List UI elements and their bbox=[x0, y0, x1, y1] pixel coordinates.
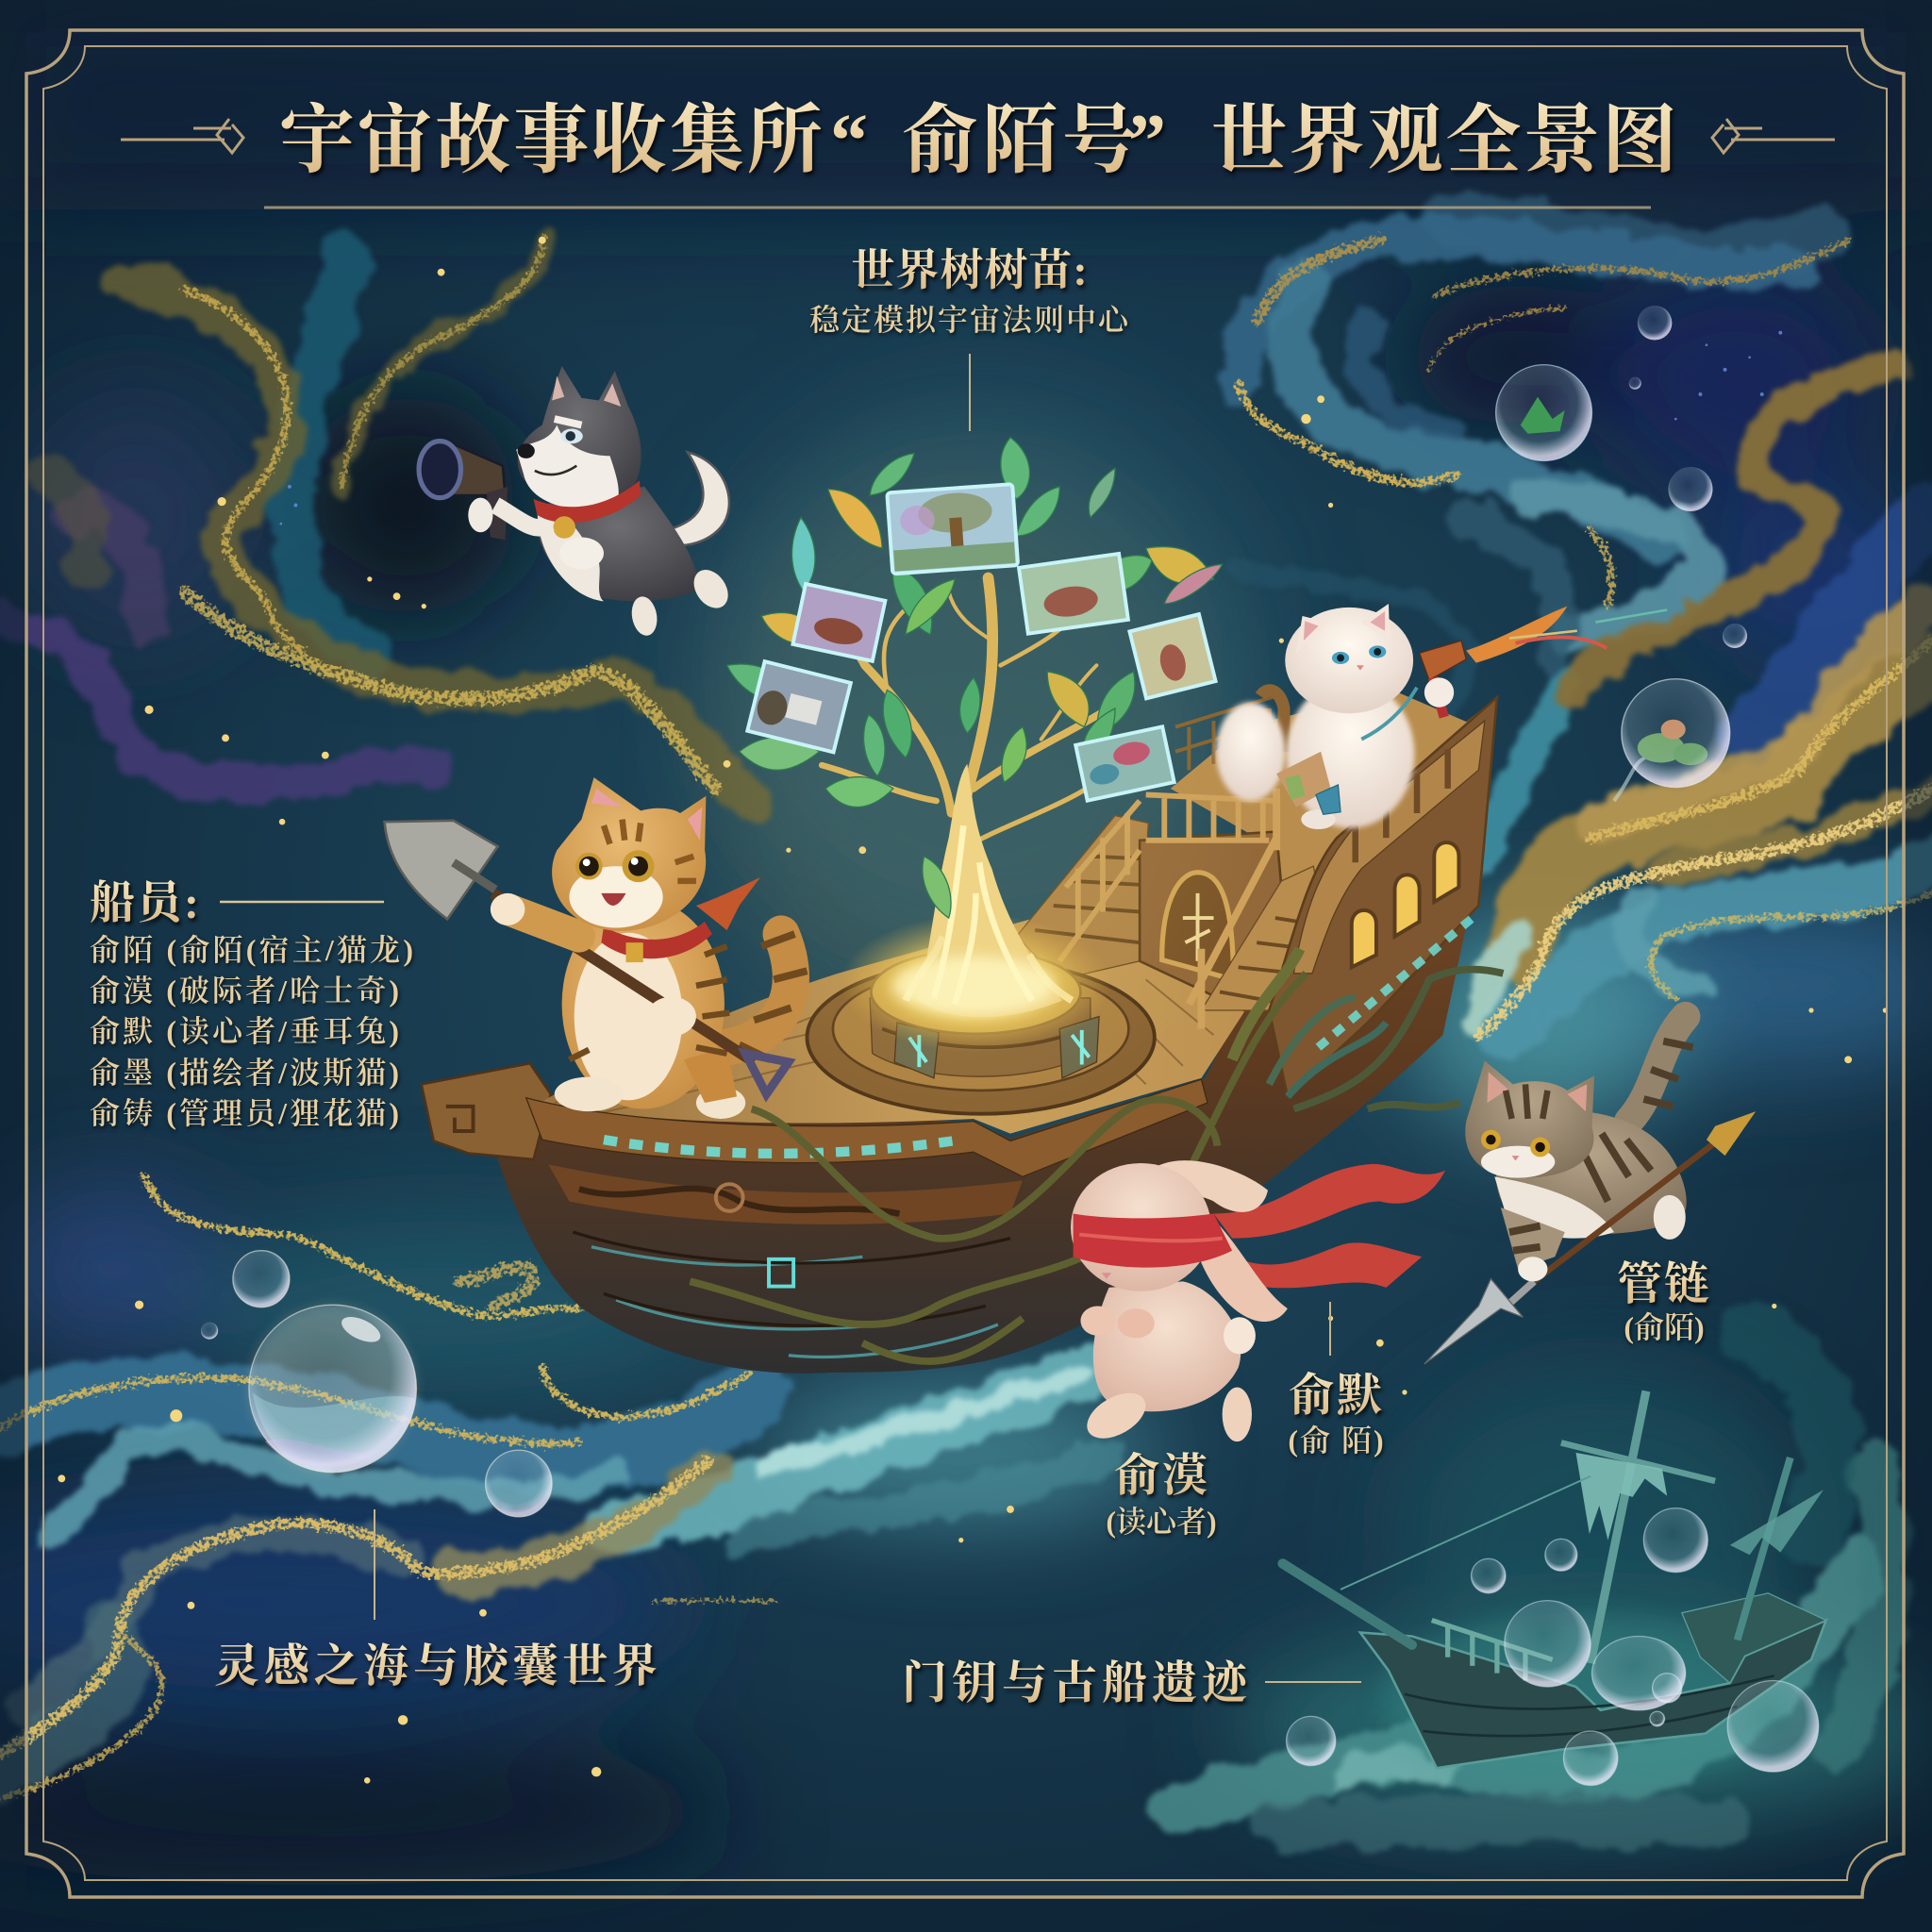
title text: ” bbox=[1128, 100, 1166, 183]
label: 俞漠: (读心者) bbox=[1106, 1505, 1217, 1539]
rabbit head bbox=[1071, 1163, 1211, 1291]
cat tail bbox=[727, 934, 791, 1047]
shovel bbox=[492, 893, 754, 1062]
ghost shipwreck bbox=[1283, 1391, 1826, 1787]
tree memory cards bbox=[747, 484, 1216, 801]
label: keys and ancient ship ruins: 门钥与古船遗迹 bbox=[902, 1658, 1250, 1708]
tabby cat with spear bbox=[1424, 1017, 1756, 1364]
husky head bbox=[518, 366, 641, 507]
husky body bbox=[537, 487, 700, 601]
label: world tree sapling bbox=[809, 246, 1131, 431]
tree leaves bbox=[727, 438, 1223, 918]
cat head bbox=[552, 777, 706, 931]
husky with telescope bbox=[419, 366, 735, 638]
cat legs and body bbox=[562, 899, 724, 1108]
label: 俞默: 俞默 bbox=[1289, 1371, 1385, 1421]
crew list: 俞漠 (破际者/哈士奇) bbox=[90, 974, 399, 1008]
crew list: 船员: bbox=[90, 878, 201, 928]
label: 管链: 管链 bbox=[1617, 1259, 1711, 1309]
persian cat with spray gun bbox=[1216, 604, 1667, 829]
husky telescope bbox=[446, 441, 506, 495]
title text: 宇宙故事收集所 bbox=[279, 100, 823, 183]
title bbox=[121, 100, 1835, 183]
rabbit blindfold tails bbox=[1214, 1164, 1445, 1239]
cat wing and collar bbox=[696, 877, 760, 930]
title divider bbox=[264, 206, 1651, 209]
label: world tree sapling: 稳定模拟宇宙法则中心 bbox=[809, 303, 1131, 337]
tabby spear bbox=[1534, 1140, 1719, 1281]
crew list: 俞默 (读心者/垂耳兔) bbox=[90, 1014, 399, 1048]
label: 俞默 bbox=[1288, 1302, 1386, 1457]
persian body bbox=[1287, 680, 1414, 828]
ship main deck bbox=[540, 838, 1269, 1134]
label: 管链: (俞陌) bbox=[1624, 1310, 1705, 1344]
label: 管链 bbox=[1617, 1259, 1711, 1344]
wreck bubbles bbox=[1287, 1508, 1819, 1786]
persian tail bbox=[1216, 702, 1285, 801]
stern cabin with door bbox=[1140, 832, 1281, 1010]
stern windows bbox=[1352, 842, 1458, 967]
tree branches bbox=[820, 578, 1124, 850]
cat arms bbox=[508, 909, 579, 937]
nebula: star sparkles bbox=[58, 237, 1888, 1784]
crew list bbox=[90, 878, 413, 1130]
crew list: 俞铸 (管理员/狸花猫) bbox=[90, 1096, 399, 1130]
rabbit ears bbox=[1140, 1160, 1268, 1212]
ship bow block bbox=[422, 1063, 551, 1159]
staircase left bbox=[1017, 816, 1148, 979]
ship rail with runes bbox=[526, 1079, 1208, 1176]
tree trunk flame bbox=[918, 764, 1062, 1017]
ship hull bbox=[498, 697, 1497, 1374]
title ornament right bbox=[1712, 119, 1835, 153]
ship bbox=[422, 690, 1503, 1374]
label: 俞漠 bbox=[1106, 1451, 1217, 1539]
label: 俞默: (俞 陌) bbox=[1288, 1424, 1386, 1457]
world tree bbox=[702, 438, 1223, 1072]
persian head bbox=[1285, 608, 1413, 713]
label: world tree sapling: 世界树树苗: bbox=[851, 246, 1089, 294]
bubbles: capsule worlds left bbox=[201, 1251, 552, 1517]
husky collar bbox=[534, 480, 641, 523]
stern upper deck bbox=[1171, 690, 1478, 918]
tabby head bbox=[1465, 1061, 1594, 1178]
title text: “ bbox=[830, 100, 868, 183]
ship vines bbox=[690, 949, 1503, 1361]
title ornament left bbox=[121, 119, 243, 153]
title text: 俞陌号 bbox=[902, 100, 1138, 183]
husky tail bbox=[653, 452, 729, 545]
stern wall and railing bbox=[1269, 697, 1497, 1096]
tabby body bbox=[1496, 1110, 1687, 1234]
crew list: 俞陌 (俞陌(宿主/猫龙) bbox=[90, 933, 413, 967]
wreck stern deck bbox=[1682, 1593, 1826, 1683]
rabbit body bbox=[1093, 1281, 1241, 1411]
balustrades bbox=[1059, 789, 1276, 1029]
staircase right bbox=[1201, 866, 1321, 1010]
crew list: 俞墨 (描绘者/波斯猫) bbox=[90, 1056, 399, 1090]
spray gun and paint bbox=[1420, 641, 1466, 680]
persian strap and pouch bbox=[1361, 688, 1417, 740]
altar ring bbox=[807, 961, 1155, 1114]
wreck bowsprit and rail bbox=[1283, 1563, 1412, 1645]
label: sea of inspiration: 灵感之海与胶囊世界 bbox=[214, 1641, 658, 1691]
title text: 世界观全景图 bbox=[1211, 100, 1677, 183]
nebula: blue starfield bbox=[279, 331, 1782, 525]
ship carving bbox=[548, 1164, 1023, 1224]
rabbit with red blindfold bbox=[1071, 1160, 1445, 1448]
wreck hull bbox=[1360, 1621, 1826, 1768]
tabby tail bbox=[1629, 1017, 1686, 1122]
rabbit blindfold bbox=[1074, 1214, 1232, 1268]
orange tabby cat with shovel bbox=[385, 777, 807, 1119]
label: 俞漠: 俞漠 bbox=[1114, 1451, 1210, 1501]
wreck masts and sails bbox=[1591, 1391, 1646, 1663]
bubbles: capsule worlds right bbox=[1496, 306, 1747, 801]
